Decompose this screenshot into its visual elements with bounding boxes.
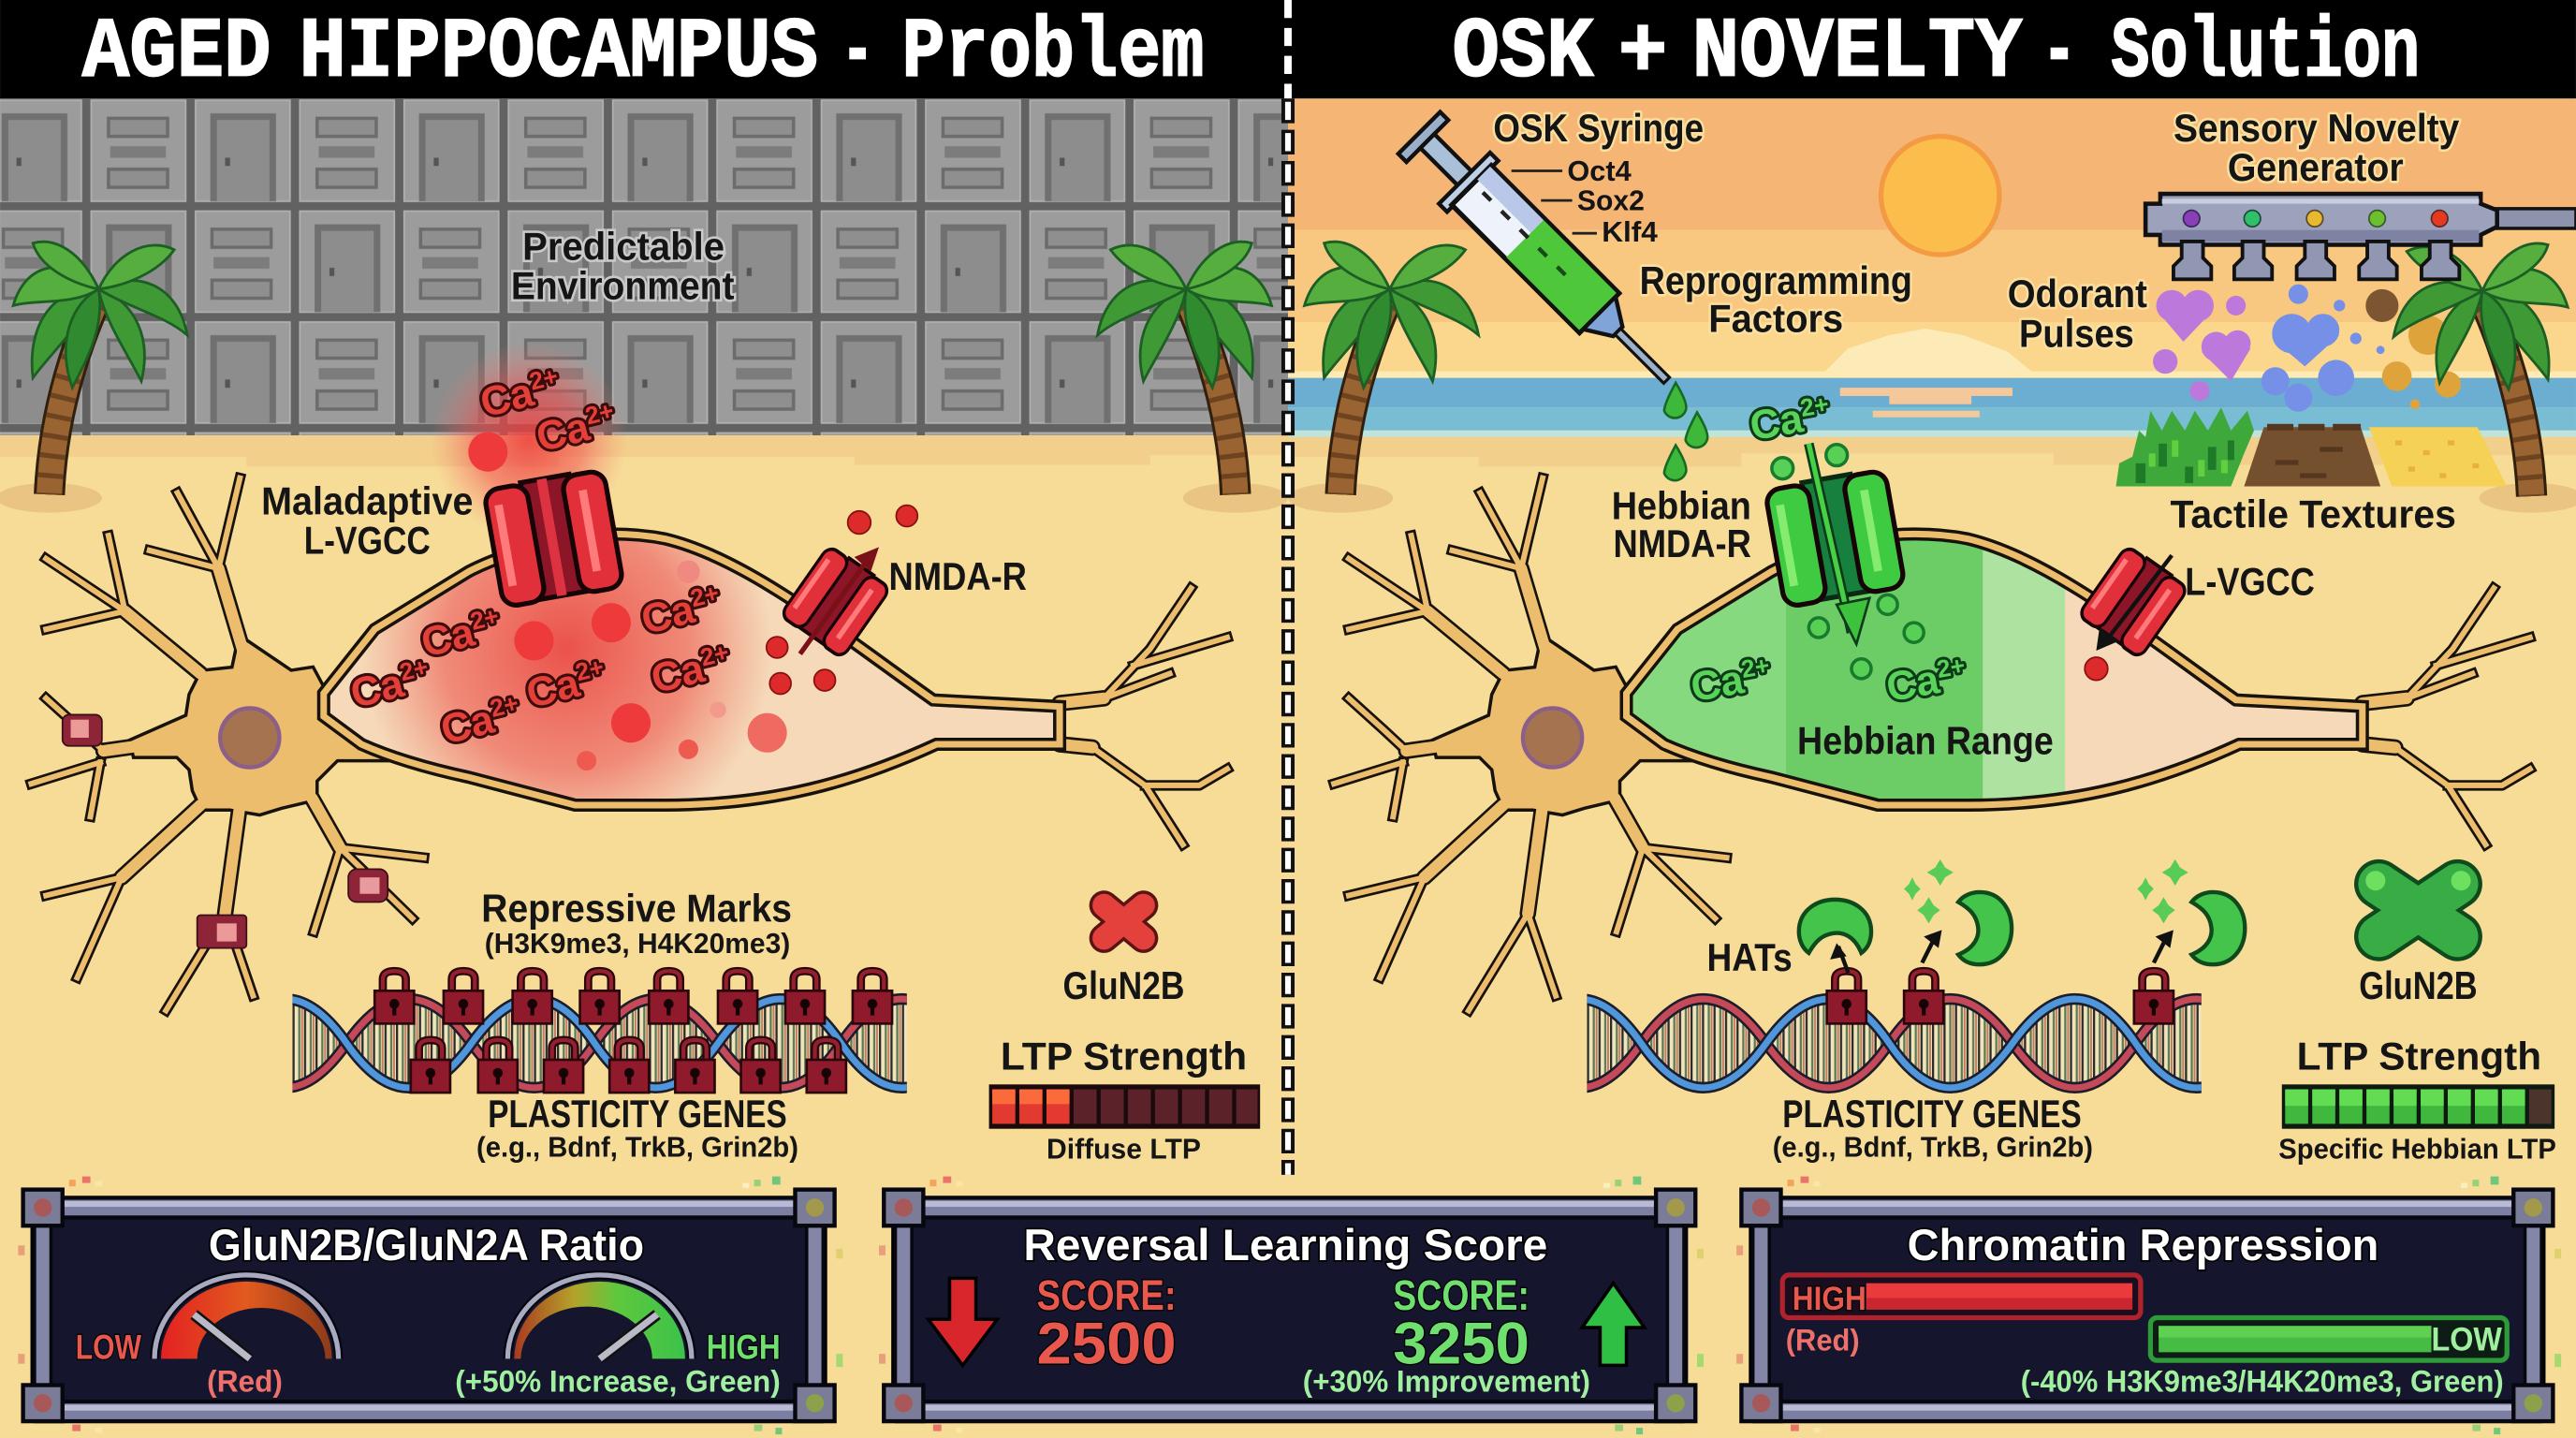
icon: novelty generator [2145,194,2576,279]
header: aged hippocampus: Problem [902,6,1204,102]
label: LTP strength: LTP Strength [2297,1035,2541,1078]
gauge labels: LOW [76,1328,141,1366]
label: reprogramming factors: Reprogramming [1640,259,1912,302]
calcium labels left: Ca [647,645,709,702]
gauge: low [154,1275,339,1358]
header bar [0,0,2576,98]
label: maladaptive L-VGCC: Maladaptive [261,479,474,522]
calcium labels left: Ca [637,586,699,643]
header: OSK novelty: - [2042,6,2076,102]
score: aged: SCORE: [1036,1271,1177,1319]
calcium labels right: Ca [1883,656,1942,711]
arrow: down [929,1278,997,1365]
label: sensory novelty generator: Sensory Novelty [2174,107,2459,150]
label: maladaptive L-VGCC [261,479,474,562]
label: plasticity genes [1773,1093,2093,1164]
label: maladaptive L-VGCC: L-VGCC [304,519,431,562]
label: plasticity genes: PLASTICITY GENES [488,1093,787,1136]
header: OSK novelty: + [1618,6,1667,102]
green calcium dots [1772,445,1924,679]
bar: LTP strength low [989,1084,1260,1129]
label: odorant pulses [2008,272,2147,355]
label: hebbian range: Hebbian Range [1797,720,2054,763]
label: OSK syringe and factors: Sox2 [1577,184,1645,217]
calcium labels left: Ca [476,369,538,426]
label: red: (Red) [1786,1324,1860,1357]
gauge: high [507,1275,692,1358]
text: predictable environment: Environment [511,264,735,307]
channel: NMDA-R small [780,545,891,658]
label: OSK syringe and factors: Oct4 [1567,154,1632,187]
label: GluN2B: GluN2B [1063,964,1184,1007]
header: aged hippocampus [82,6,1204,102]
score: treated: SCORE: [1393,1271,1530,1319]
arrow: NMDA flow [800,547,879,654]
calcium labels left [346,361,736,754]
calcium labels left: 2+ [487,689,521,723]
label: hebbian NMDA-R [1612,485,1751,565]
label: odorant pulses: Pulses [2019,312,2134,355]
label: sensory novelty generator [2174,107,2459,189]
label: specific hebbian LTP: Specific Hebbian LTP [2278,1132,2556,1165]
label: OSK syringe and factors [1493,107,1704,248]
calcium labels left: 2+ [688,579,722,612]
calcium labels right: 2+ [1798,389,1831,422]
calcium labels left: 2+ [467,602,502,636]
channel: hebbian NMDA-R [1764,468,1905,608]
palm tree right [1097,242,1288,513]
calcium labels left: Ca [521,660,584,717]
palm tree left [1288,242,1479,513]
score: treated: (+30% Improvement) [1303,1365,1590,1399]
label: plasticity genes [476,1093,798,1164]
icon: green drops [1664,383,1707,480]
palm tree left [0,242,187,513]
icon: GluN2B small red [1104,905,1144,938]
palm tree right [2393,243,2576,513]
neuron [31,444,1227,1010]
label: reprogramming factors [1640,259,1912,341]
DNA with many locks [224,971,964,1093]
label: L-VGCC: L-VGCC [2185,560,2315,603]
gauge labels: (Red) [207,1365,283,1399]
panel: OSK novelty solution [1288,6,2576,1165]
title: Chromatin Repression [1908,1221,2378,1270]
header: OSK novelty: NOVELTY [1692,6,2023,102]
label: NMDA-R: NMDA-R [889,555,1027,598]
title: GluN2B/GluN2A Ratio [209,1221,644,1270]
calcium glow and dots [431,342,917,770]
calcium labels left: Ca [346,660,408,717]
text: predictable environment: Predictable [522,225,724,268]
arrows and sparkles [1830,859,2188,973]
panel: reversal learning score [879,1177,1704,1434]
label: OSK syringe and factors: Klf4 [1602,215,1658,248]
bar: high: HIGH [1793,1281,1866,1317]
gauge labels: (+50% Increase, Green) [455,1365,781,1399]
gauge labels [76,1328,781,1399]
label: GluN2B: GluN2B [2359,964,2478,1007]
header: aged hippocampus: AGED [82,6,271,102]
label: tactile textures: Tactile Textures [2170,492,2456,536]
bar: low [2150,1318,2507,1360]
panel: GluN2B/GluN2A ratio [18,1177,842,1434]
label: OSK syringe and factors: OSK Syringe [1493,107,1704,150]
bar: LTP strength high [2282,1084,2554,1129]
label: repressive marks: Repressive Marks [481,888,792,931]
score: treated [1303,1271,1590,1399]
title: Reversal Learning Score [1023,1221,1547,1270]
label: sensory novelty generator: Generator [2228,146,2404,189]
label: repressive marks: (H3K9me3, H4K20me3) [485,927,790,960]
icon: odor puffs [2153,285,2461,412]
label: minus 40 percent: (-40% H3K9me3/H4K20me3, Green) [2021,1365,2504,1399]
header: aged hippocampus: HIPPOCAMPUS [299,6,818,102]
label: hebbian NMDA-R: Hebbian [1612,485,1751,528]
icon: tactile textures [2116,407,2507,486]
header: OSK novelty: OSK [1453,6,1594,102]
score: aged: 2500 [1036,1312,1177,1377]
icon: OSK syringe [1394,108,1692,406]
panel: chromatin repression [1736,1177,2561,1434]
label: plasticity genes: (e.g., Bdnf, TrkB, Grin2b) [1773,1131,2093,1164]
calcium labels right: Ca [1747,395,1807,449]
calcium labels left: Ca [532,404,593,461]
header: aged hippocampus: - [842,6,874,102]
arrow: up [1582,1284,1645,1365]
calcium labels left: 2+ [697,638,731,672]
label: plasticity genes: PLASTICITY GENES [1782,1093,2082,1136]
label: repressive marks [481,888,792,960]
icons: HAT enzymes [1799,892,2245,964]
label: odorant pulses: Odorant [2008,272,2147,315]
calcium labels left: 2+ [397,653,431,686]
calcium labels right [1688,389,1970,711]
neuron [1334,478,2530,1010]
calcium labels right: 2+ [1935,651,1967,683]
arrow: calcium through channel [1808,444,1869,644]
calcium labels left: Ca [417,609,478,667]
calcium labels right: Ca [1688,656,1747,711]
channel: L-VGCC small [2078,545,2189,658]
bar: low: LOW [2431,1322,2503,1358]
header: OSK novelty: Solution [2111,6,2420,102]
label: reprogramming factors: Factors [1708,298,1843,341]
label: HATs: HATs [1707,936,1793,979]
calcium labels left: 2+ [582,396,617,431]
calcium labels left: 2+ [573,653,607,686]
gauge labels: HIGH [707,1328,781,1366]
arrow: L-VGCC block [2085,555,2172,681]
header: OSK novelty [1453,6,2420,102]
calcium labels right: 2+ [1739,651,1772,683]
panel: aged hippocampus problem [0,6,1288,1165]
background: predictable wall [0,98,1288,466]
divider [1286,0,1290,1175]
calcium labels left: Ca [436,697,499,754]
score: aged [1036,1271,1177,1377]
bar: high [1782,1275,2141,1318]
channel: maladaptive L-VGCC [483,468,623,608]
label: diffuse LTP: Diffuse LTP [1046,1132,1201,1165]
label: plasticity genes: (e.g., Bdnf, TrkB, Grin2b) [476,1131,798,1164]
calcium labels left: 2+ [527,361,561,396]
score: treated: 3250 [1393,1312,1530,1377]
text: predictable environment [511,225,735,307]
icon: GluN2B large green [2365,871,2471,936]
label: hebbian NMDA-R: NMDA-R [1613,522,1751,565]
label: LTP strength: LTP Strength [1001,1035,1247,1078]
DNA with few locks [1518,971,2259,1088]
icon: sun [1881,137,1999,255]
background: beach sunset [1288,98,2576,466]
